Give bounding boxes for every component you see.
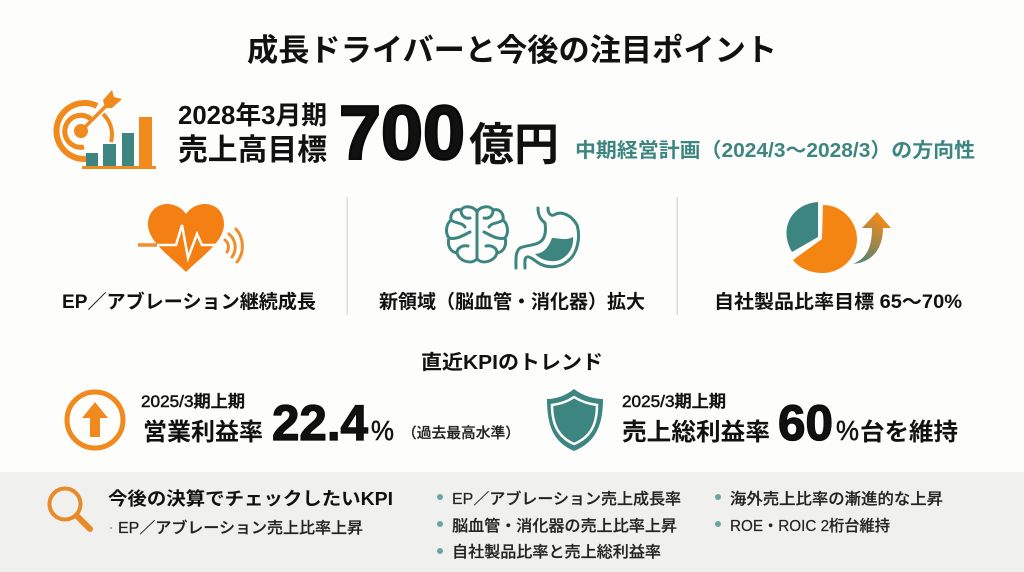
icon: heart with pulse and waves xyxy=(138,204,242,272)
period label: 2025/3期上期 xyxy=(622,392,726,411)
icon: magnifier xyxy=(50,488,90,529)
metric value: % xyxy=(371,415,394,446)
panel: own product ratio xyxy=(714,202,962,313)
target value: 億円 xyxy=(469,119,559,170)
panel: sales target xyxy=(56,90,975,176)
panel: operating margin xyxy=(67,392,520,451)
target value: 700 xyxy=(339,91,465,176)
plan subtitle: 中期経営計画（2024/3～2028/3）の方向性 xyxy=(575,139,975,162)
metric label: 売上総利益率 xyxy=(622,419,770,446)
icon: stomach xyxy=(516,208,579,268)
label: 新領域（脳血管・消化器）拡大 xyxy=(379,290,645,313)
panel: gross margin xyxy=(547,389,958,451)
icon: shield xyxy=(547,389,603,451)
metric suffix: 台を維持 xyxy=(860,419,958,446)
target label: 売上高目標 xyxy=(178,134,327,167)
icon: brain xyxy=(447,207,507,262)
icon: target with bar chart xyxy=(56,90,156,169)
icon: up arrow circle xyxy=(67,392,123,448)
checklist item: 海外売上比率の漸進的な上昇 xyxy=(730,490,943,508)
label: EP／アブレーション継続成長 xyxy=(62,290,316,313)
icon: pie chart with arrow xyxy=(786,202,891,273)
panel: EP ablation growth xyxy=(62,204,316,313)
target value xyxy=(339,91,559,176)
metric value: 60 xyxy=(778,395,833,451)
panel: new fields xyxy=(379,207,645,313)
checklist item: 自社製品比率と売上総利益率 xyxy=(452,543,661,561)
metric suffix: % xyxy=(836,415,859,446)
panel: KPI checklist xyxy=(0,472,1024,572)
KPI trend heading: 直近KPIのトレンド xyxy=(421,351,603,374)
metric value: 22.4 xyxy=(272,395,368,451)
metric suffix xyxy=(836,415,958,446)
metric label: 営業利益率 xyxy=(143,419,263,446)
checklist item: 脳血管・消化器の売上比率上昇 xyxy=(452,517,677,535)
period label: 2025/3期上期 xyxy=(141,392,245,411)
note: （過去最高水準） xyxy=(402,425,520,442)
checklist heading: 今後の決算でチェックしたいKPI xyxy=(108,488,393,509)
checklist item: EP／アブレーション売上成長率 xyxy=(452,489,681,508)
label: 自社製品比率目標 65～70% xyxy=(714,291,962,313)
target period label: 2028年3月期 xyxy=(178,102,327,130)
checklist item: EP／アブレーション売上比率上昇 xyxy=(118,518,363,537)
title: 成長ドライバーと今後の注目ポイント xyxy=(247,33,777,68)
checklist item: ROE・ROIC 2桁台維持 xyxy=(730,517,890,535)
